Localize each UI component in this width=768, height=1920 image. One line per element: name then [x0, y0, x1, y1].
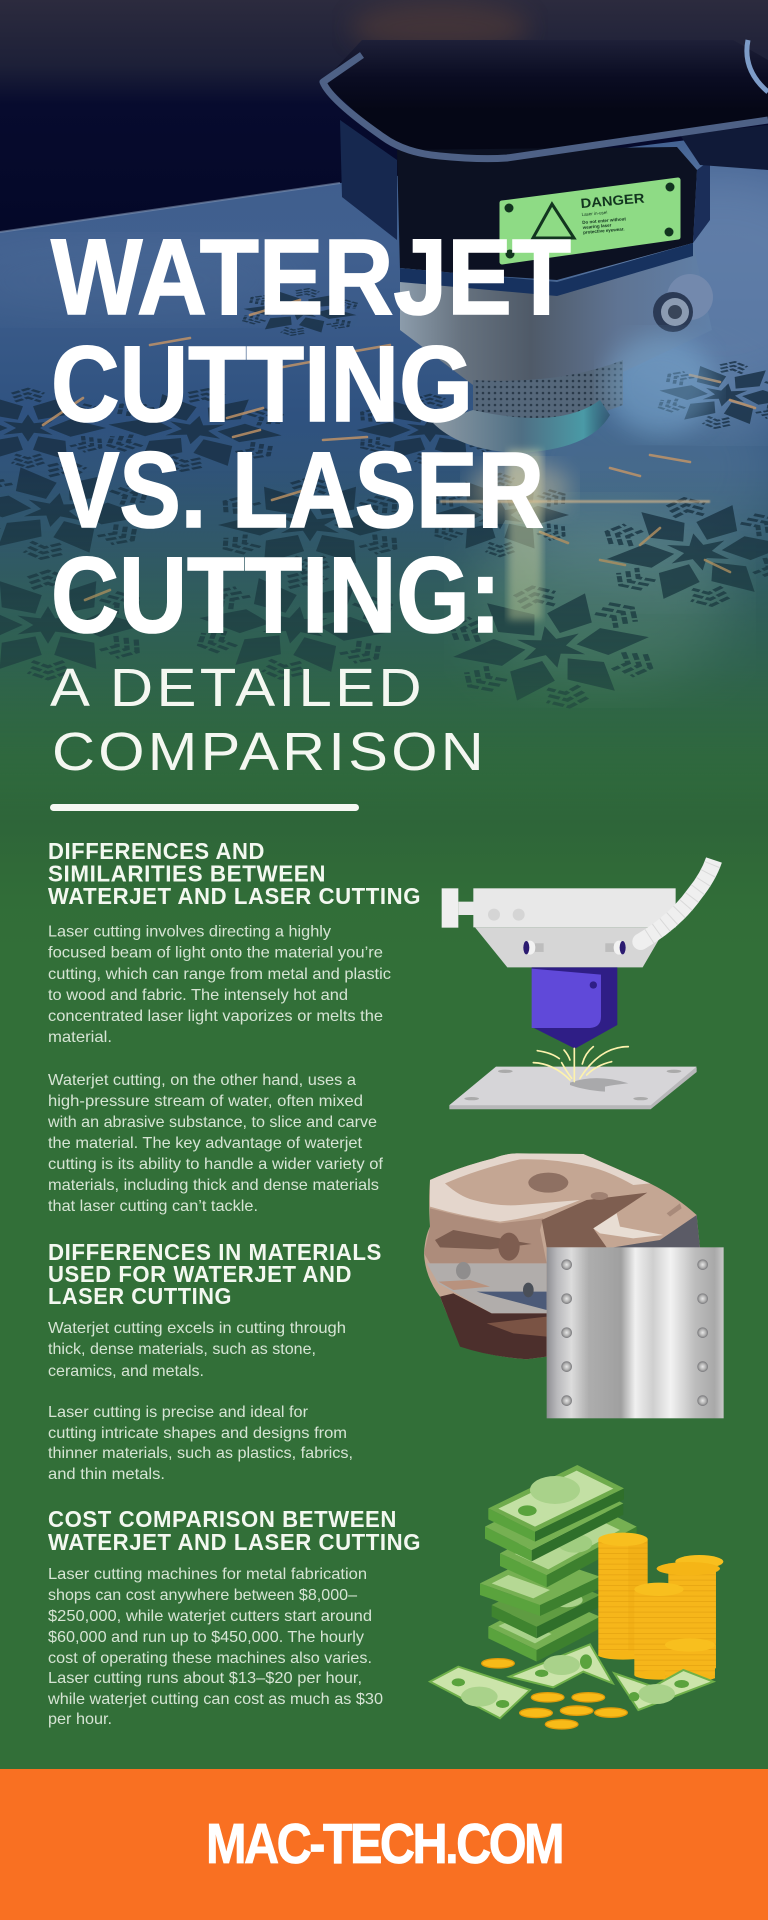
section 2 heading: [48, 1239, 382, 1309]
section 2 heading: LASER CUTTING: [48, 1283, 232, 1309]
section 1 body text: Waterjet cutting, on the other hand, uses a: [48, 1072, 356, 1089]
loose bills: [430, 1644, 713, 1718]
laser beam flare: [440, 450, 710, 620]
danger label: wearing laser: [581, 222, 612, 230]
section 3 body text: Laser cutting runs about $13–$20 per hour,: [48, 1670, 362, 1687]
section 1 body text: the material. The key advantage of waterjet: [48, 1135, 363, 1152]
section 1: differences and similarities: [47, 838, 421, 1215]
icon: stone and metal plate: [424, 1153, 724, 1418]
title: CUTTING:: [51, 534, 501, 655]
danger label: protective eyewear.: [583, 226, 625, 235]
stone: [424, 1153, 700, 1359]
danger label: Laser in-use!: [581, 210, 608, 217]
subtitle: A DETAILED: [50, 658, 425, 718]
section 3 body text: shops can cost anywhere between $8,000–: [48, 1587, 357, 1604]
section 1 heading: WATERJET AND LASER CUTTING: [48, 883, 421, 909]
footer band: [0, 1769, 768, 1920]
title: VS. LASER: [58, 429, 544, 550]
copper edge highlights: [43, 290, 755, 600]
section 1 body text: Laser cutting involves directing a highly: [48, 924, 331, 940]
bill stacks: [480, 1465, 637, 1662]
section 2 body text: thick, dense materials, such as stone,: [48, 1341, 316, 1358]
nozzle: [532, 967, 617, 1049]
section 3 body text: $250,000, while waterjet cutters start around: [48, 1608, 372, 1625]
section 3: cost comparison: [47, 1506, 421, 1728]
coin stacks: [598, 1533, 723, 1681]
section 1 body text: material.: [48, 1029, 112, 1046]
section 2 body text: thinner materials, such as plastics, fabrics,: [48, 1445, 353, 1462]
section 1 body text: high-pressure stream of water, often mixed: [48, 1093, 363, 1110]
metal plate: [547, 1247, 724, 1418]
section 2 body text: and thin metals.: [48, 1466, 165, 1483]
section 1 body text: with an abrasive substance, to slice and carve: [47, 1114, 377, 1131]
beam and sparks: [533, 1047, 628, 1082]
section 1 body text: concentrated laser light vaporizes or melts the: [48, 1008, 383, 1025]
loose coins: [482, 1659, 627, 1729]
title underline: [50, 804, 359, 811]
section 2 heading: DIFFERENCES IN MATERIALS: [48, 1239, 382, 1265]
section 2 body text: cutting intricate shapes and designs from: [48, 1425, 347, 1442]
section 1 body text: that laser cutting can’t tackle.: [48, 1198, 258, 1215]
section 3 heading: WATERJET AND LASER CUTTING: [48, 1529, 421, 1555]
section 1 heading: [48, 838, 421, 909]
danger label: Do not enter without: [582, 216, 627, 225]
section 3 body text: while waterjet cutting can cost as much as $30: [47, 1691, 383, 1708]
section 3 heading: COST COMPARISON BETWEEN: [48, 1506, 397, 1532]
section 1 body text: [47, 924, 391, 1215]
section 2 body text: Laser cutting is precise and ideal for: [48, 1404, 309, 1421]
background photo: laser cutting head over metal sheet: [0, 0, 768, 830]
smoke: [605, 335, 715, 435]
section 2 body text: Waterjet cutting excels in cutting through: [48, 1320, 346, 1337]
danger label: [502, 180, 678, 262]
section 1 body text: cutting, which can range from metal and plastic: [48, 966, 391, 983]
section 2 heading: USED FOR WATERJET AND: [48, 1261, 352, 1287]
section 3 body text: cost of operating these machines also varies.: [48, 1650, 372, 1667]
section 1 body text: cutting is its ability to handle a wider variety of: [48, 1156, 384, 1173]
bolt and bracket: [653, 274, 713, 332]
title: [51, 216, 571, 655]
section 1 heading: DIFFERENCES AND: [48, 838, 265, 864]
section 3 body text: Laser cutting machines for metal fabrication: [48, 1566, 367, 1583]
hose: [641, 860, 714, 942]
section 2 body text: [48, 1320, 353, 1483]
section 3 body text: per hour.: [48, 1711, 112, 1728]
knurled ring: [473, 360, 623, 424]
subtitle: [50, 658, 487, 782]
laser head machine: [323, 40, 768, 453]
icon: laser cutter head: [442, 860, 714, 1109]
section 3 heading: [48, 1506, 421, 1555]
section 3 body text: [47, 1566, 383, 1728]
metal sheet star cut-outs: [0, 286, 768, 717]
cylinder: [400, 243, 712, 385]
footer website address: MAC-TECH.COM: [206, 1812, 562, 1876]
section 1 body text: materials, including thick and dense materials: [48, 1177, 379, 1194]
metal plate: [449, 1067, 697, 1109]
section 1 body text: to wood and fabric. The intensely hot and: [48, 987, 348, 1004]
danger label: DANGER: [580, 191, 645, 211]
section 3 body text: $60,000 and run up to $450,000. The hourly: [48, 1629, 364, 1646]
subtitle: COMPARISON: [52, 722, 487, 782]
section 2: differences in materials: [48, 1239, 382, 1483]
title: WATERJET: [51, 216, 571, 337]
section 1 heading: SIMILARITIES BETWEEN: [48, 860, 326, 886]
section 1 body text: focused beam of light onto the material you’re: [48, 944, 383, 962]
title: CUTTING: [51, 323, 473, 444]
section 2 body text: ceramics, and metals.: [48, 1363, 204, 1380]
green page background: [0, 830, 768, 1770]
icon: money and coins: [430, 1465, 723, 1729]
